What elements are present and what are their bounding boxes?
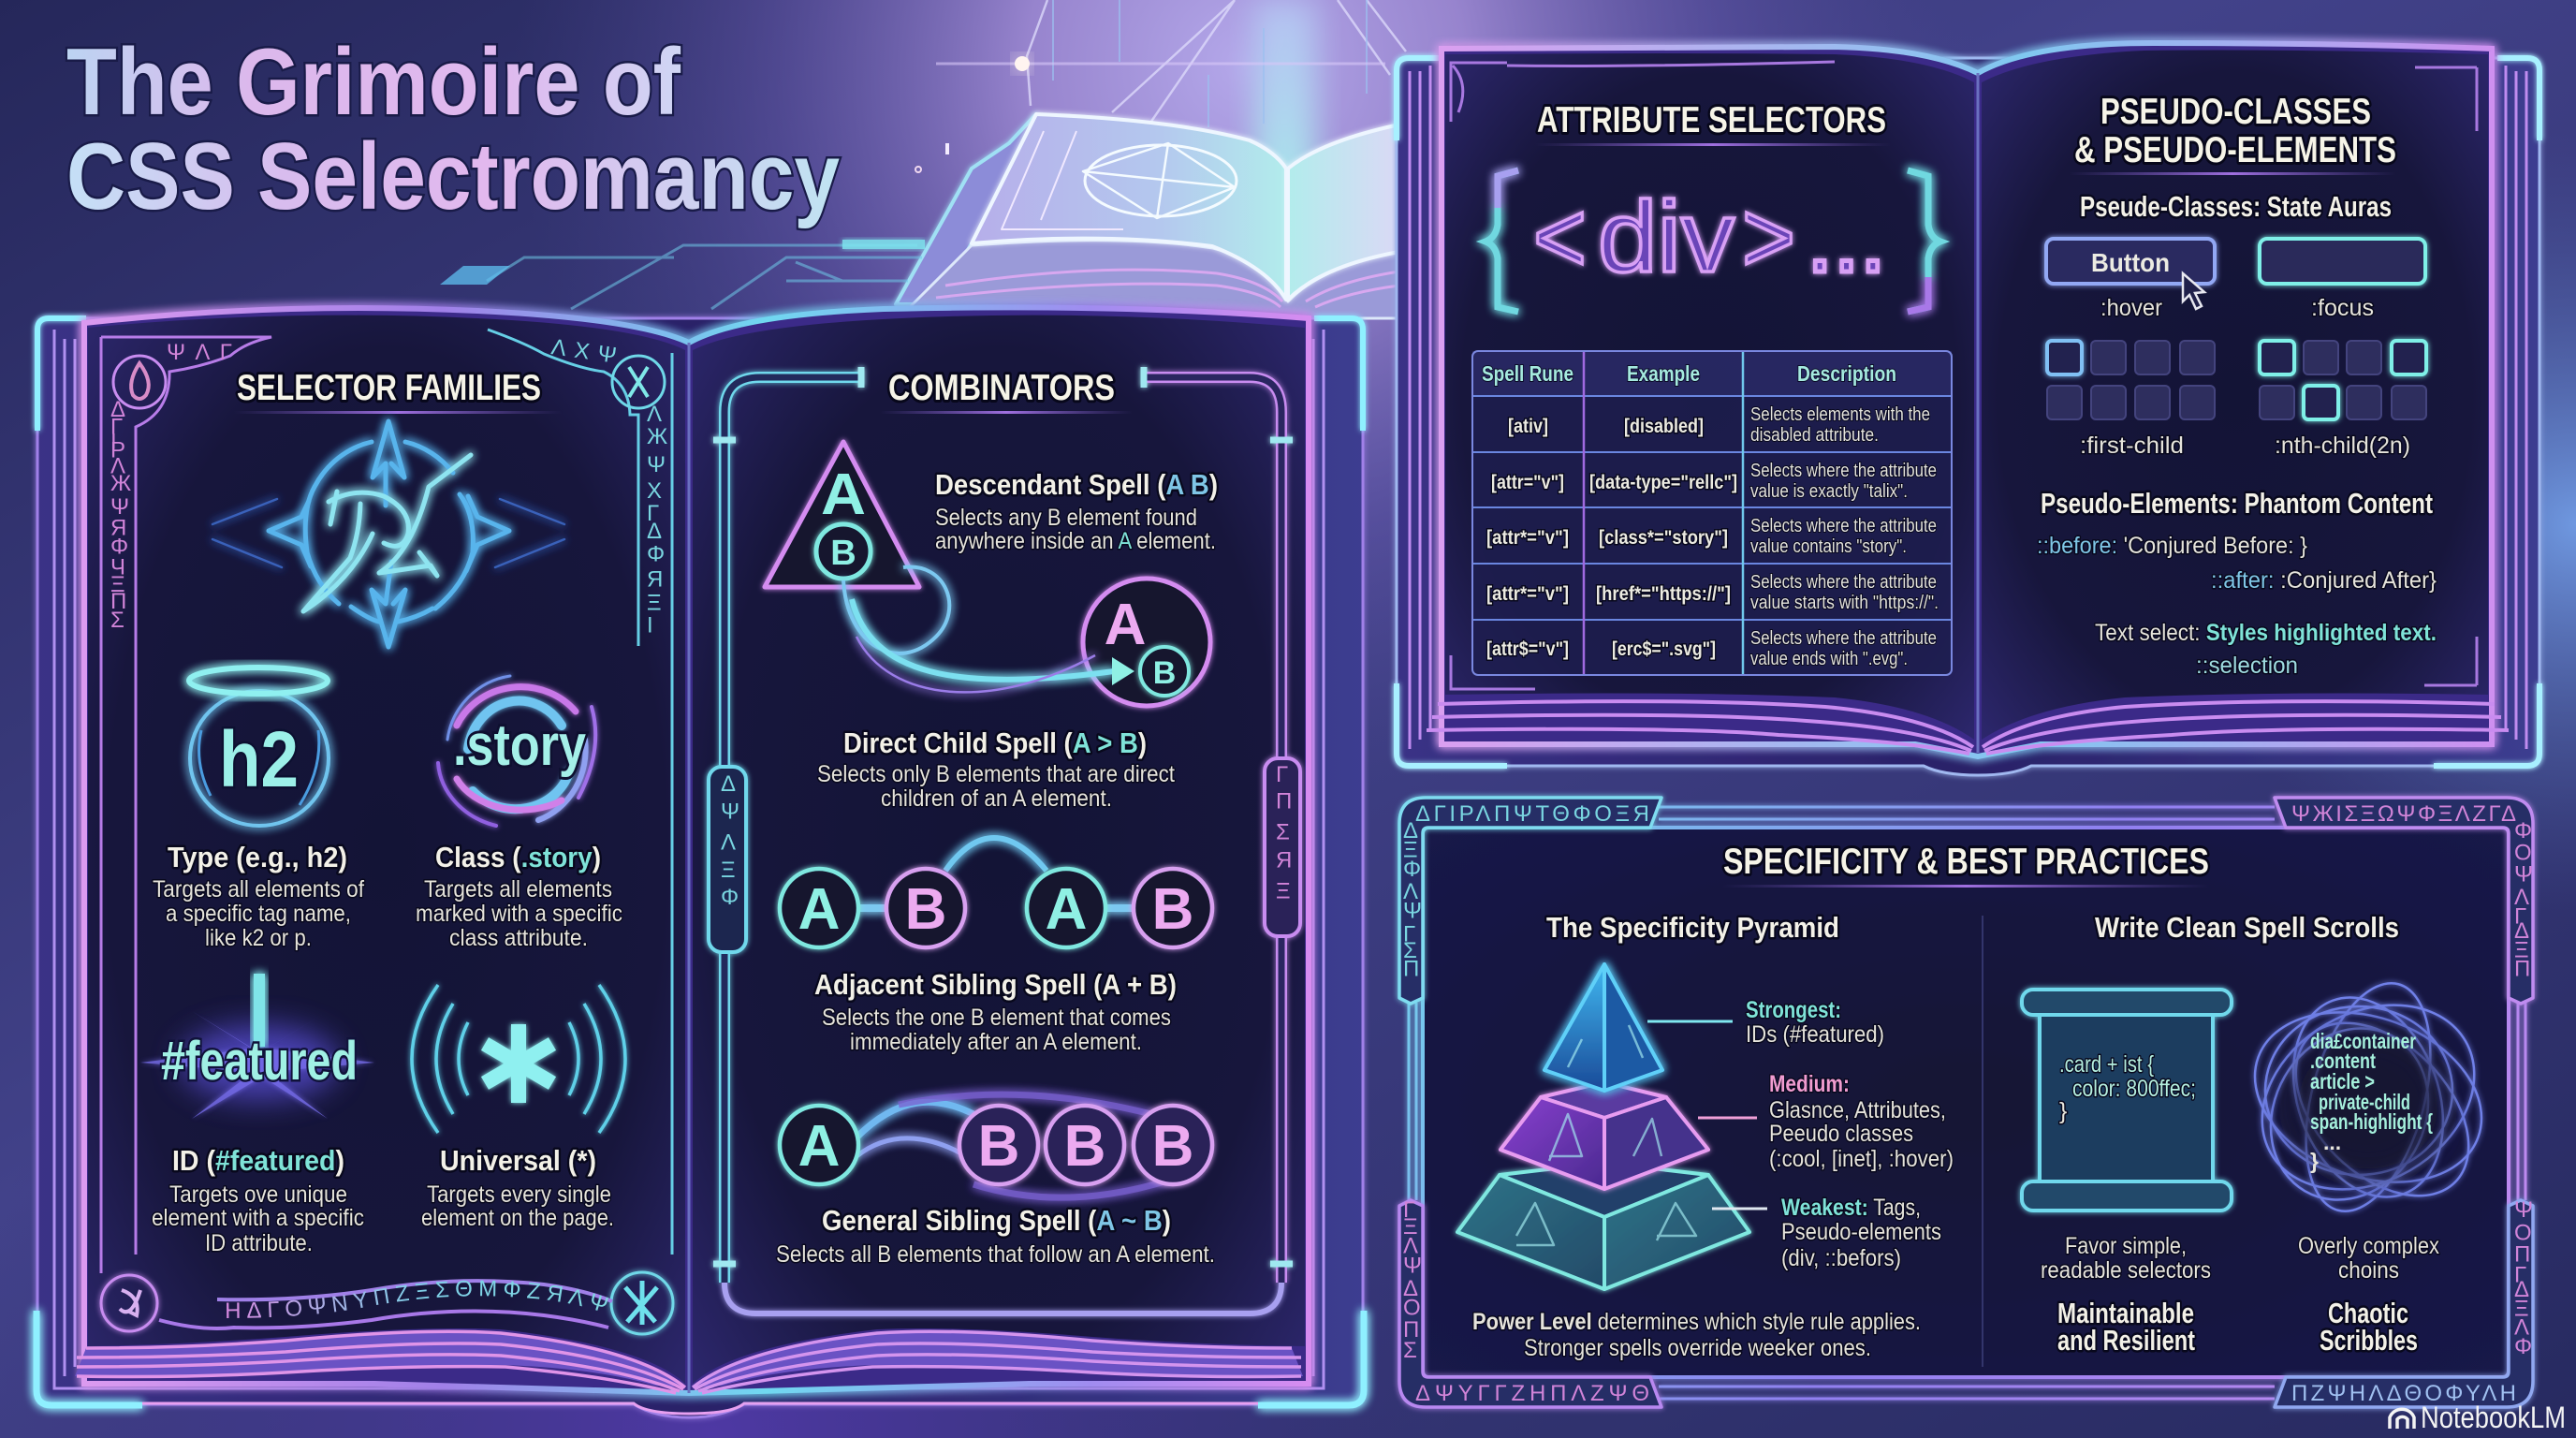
subheading: state auras: Pseude-Classes: State Auras xyxy=(2080,190,2392,223)
title xyxy=(66,30,840,229)
button: hover state xyxy=(2046,239,2215,321)
text: descendant spell xyxy=(935,468,1218,554)
text: general sibling spell: General Sibling Spell (A ~ B) xyxy=(822,1204,1171,1237)
leader lines xyxy=(1647,1021,1767,1209)
table: attribute selector runes: [attr*="v"] xyxy=(1486,527,1569,549)
icon: clean scroll: .card + ist { xyxy=(2059,1051,2154,1078)
diagram: adjacent sibling spell: B xyxy=(905,877,946,942)
text: id selector: element with a specific xyxy=(152,1205,364,1231)
text: chaotic column: Overly complex xyxy=(2298,1233,2439,1259)
code: chaotic selector: span-highlight { xyxy=(2310,1109,2433,1134)
diagram: descendant spell: A xyxy=(821,462,866,527)
heading: pseudo-classes and pseudo-elements: & PSEUDO-ELEMENTS xyxy=(2074,130,2396,170)
label: medium: Medium: xyxy=(1769,1071,1850,1097)
text: pseudo-elements xyxy=(2037,487,2437,679)
diagram: descendant spell xyxy=(765,442,1210,706)
code: chaotic selector: article > xyxy=(2310,1069,2375,1093)
text: pseudo-elements: Text select: Styles highlighted text. xyxy=(2095,620,2437,646)
icon: clean scroll: color: 800ffec; xyxy=(2072,1076,2196,1102)
pipe capsule runes xyxy=(721,762,1292,910)
text: universal selector: Targets every single xyxy=(427,1181,611,1208)
diagram: general sibling spell xyxy=(780,1094,1212,1197)
table: attribute selector runes: [class*="story"] xyxy=(1599,527,1728,549)
text: id selector xyxy=(152,1144,364,1256)
pyramid top tier xyxy=(1544,964,1662,1091)
code: chaotic selector: .content xyxy=(2310,1049,2376,1073)
panel frame xyxy=(1399,798,2533,1407)
table: attribute selector runes xyxy=(1472,351,1952,675)
subheading: specificity pyramid: The Specificity Pyramid xyxy=(1546,911,1839,944)
left page ornate frame xyxy=(101,330,673,1334)
text: descendant spell: Descendant Spell (A B) xyxy=(935,468,1218,501)
button: hover state: :hover xyxy=(2100,295,2162,321)
heading: selector families: SELECTOR FAMILIES xyxy=(237,368,541,408)
background illustration: glowing open book with rays xyxy=(440,0,1406,318)
diagram: general sibling spell: B xyxy=(978,1114,1019,1179)
frame rune bands: ΦΟΨΛΓΔΞΠ xyxy=(2514,818,2533,982)
table: attribute selector runes: Selects where the attribute xyxy=(1750,516,1937,536)
text: direct child spell: children of an A element. xyxy=(881,785,1112,812)
diagram: general sibling spell: B xyxy=(1064,1114,1105,1179)
text: id selector: ID attribute. xyxy=(205,1230,313,1256)
back book pages xyxy=(896,114,1404,318)
frame rune bands: ΔΨΥΓΓΖΗΠΛΖΨΘ xyxy=(1415,1381,1649,1406)
table: attribute selector runes: Example xyxy=(1627,361,1700,386)
text: general sibling spell: Selects all B elements that follow an A element. xyxy=(776,1241,1215,1268)
text: type selector: like k2 or p. xyxy=(205,925,312,951)
label: weakest: (div, ::befors) xyxy=(1781,1245,1901,1271)
icon: clean scroll xyxy=(2022,990,2232,1211)
left page rune bands: ΗΔΓΟΨΝΥΠΖΞΣΘΜΦΖЯΛΨ xyxy=(227,1281,608,1318)
floor grid xyxy=(487,245,922,309)
icon: .story vortex xyxy=(438,676,595,826)
text: direct child spell xyxy=(817,726,1175,812)
label: weakest xyxy=(1781,1195,1941,1271)
pyramid middle tier xyxy=(1500,1082,1708,1189)
frame rune bands: ΔΞΦΛΨΓΣΠ xyxy=(1403,818,1422,982)
text: id selector: Targets ove unique xyxy=(169,1181,347,1208)
text: universal selector xyxy=(421,1144,614,1231)
text: universal selector: element on the page. xyxy=(421,1205,614,1231)
text: type selector: Type (e.g., h2) xyxy=(168,841,347,873)
icon: h2 ring with halo: h2 xyxy=(219,715,299,803)
frame rune bands xyxy=(1403,801,2533,1406)
text: maintainable column xyxy=(2041,1233,2211,1357)
text: chaotic column: Scribbles xyxy=(2320,1324,2418,1357)
chart: specificity pyramid xyxy=(1457,964,1749,1289)
text: pseudo-elements: ::before: 'Conjured Before: } xyxy=(2037,533,2307,559)
text: class selector: Class (.story) xyxy=(435,841,601,873)
left page rune bands: ΛΧΨ xyxy=(549,334,618,369)
text: maintainable column: readable selectors xyxy=(2041,1257,2211,1284)
subheading: clean spell scrolls: Write Clean Spell Scrolls xyxy=(2095,911,2399,944)
button: focus state: :focus xyxy=(2311,295,2374,321)
icon: div glyph with braces: ... xyxy=(1807,180,1886,293)
diagram: adjacent sibling spell: A xyxy=(1046,877,1087,942)
table: attribute selector runes: Spell Rune xyxy=(1482,361,1573,386)
text: id selector: ID (#featured) xyxy=(172,1144,344,1177)
title: The Grimoire of xyxy=(66,30,681,135)
page surfaces xyxy=(1427,51,2509,754)
label: strongest: Strongest: xyxy=(1746,997,1841,1023)
title: CSS Selectromancy xyxy=(66,125,840,229)
icon: universal asterisk with waves xyxy=(412,985,625,1133)
code: chaotic selector: dia£container xyxy=(2310,1029,2416,1053)
table: attribute selector runes: value contains "story". xyxy=(1750,536,1907,557)
diagram: adjacent sibling spell xyxy=(780,838,1212,947)
book cover and page stack xyxy=(1397,43,2539,775)
table: attribute selector runes: [erc$=".svg"] xyxy=(1612,638,1716,660)
label: weakest: Pseudo-elements xyxy=(1781,1219,1941,1245)
text: type selector: Targets all elements of xyxy=(153,876,364,902)
heading: pseudo-classes and pseudo-elements: PSEUDO-CLASSES xyxy=(2100,92,2371,132)
table: attribute selector runes: [attr$="v"] xyxy=(1486,638,1569,660)
table: attribute selector runes: [attr="v"] xyxy=(1491,472,1564,493)
table: attribute selector runes: value ends with ".evg". xyxy=(1750,649,1908,669)
icon: #featured burst xyxy=(140,974,374,1119)
table: attribute selector runes: [data-type="rellc"] xyxy=(1589,472,1737,493)
icon: chaotic scribble xyxy=(2229,968,2508,1228)
icon: clean scroll: } xyxy=(2059,1098,2067,1124)
text: chaotic column: choins xyxy=(2338,1257,2399,1284)
label: medium: (:cool, [inet], :hover) xyxy=(1769,1146,1954,1172)
text: class selector: marked with a specific xyxy=(416,901,622,927)
table: attribute selector runes: [href*="https://"] xyxy=(1596,583,1731,605)
pyramid bottom tier xyxy=(1457,1163,1749,1289)
grid: nth child xyxy=(2260,341,2426,459)
text: general sibling spell xyxy=(776,1204,1215,1268)
text: power level note: Power Level determines which style rule applies. xyxy=(1472,1309,1921,1335)
label: strongest xyxy=(1746,997,1884,1048)
button: hover state: Button xyxy=(2091,248,2170,277)
table: attribute selector runes: Selects where the attribute xyxy=(1750,572,1937,593)
label: strongest: IDs (#featured) xyxy=(1746,1021,1884,1048)
text: pseudo-elements: Pseudo-Elements: Phantom Content xyxy=(2041,487,2433,520)
text: power level note: Stronger spells override weeker ones. xyxy=(1524,1335,1871,1361)
icon: div glyph with braces xyxy=(1486,170,1940,312)
text: class selector: class attribute. xyxy=(449,925,588,951)
text: power level note xyxy=(1472,1309,1921,1361)
text: maintainable column: Maintainable xyxy=(2057,1297,2194,1329)
diagram: adjacent sibling spell: A xyxy=(798,877,840,942)
light beam and rays xyxy=(915,0,1406,197)
diagram: general sibling spell: B xyxy=(1152,1114,1193,1179)
icon: div glyph with braces: div xyxy=(1598,180,1734,293)
code: chaotic selector: ... xyxy=(2323,1130,2341,1154)
diagram: adjacent sibling spell: B xyxy=(1152,877,1193,942)
diagram: general sibling spell: A xyxy=(798,1114,840,1179)
table: attribute selector runes: Selects where the attribute xyxy=(1750,461,1937,481)
table: attribute selector runes: value is exactly "talix". xyxy=(1750,481,1908,502)
frame rune bands: ΔΓΙΡΛΠΨΤΘΦΟΞЯ xyxy=(1415,801,1649,827)
panel: upper right open book xyxy=(1397,43,2539,775)
left page rune bands: ΔΓΙΡΛЖΨЯΦЧΞΠΣ xyxy=(110,397,131,633)
text: universal selector: Universal (*) xyxy=(440,1144,596,1177)
table: attribute selector runes: Description xyxy=(1797,361,1896,386)
text: descendant spell: anywhere inside an A element. xyxy=(935,528,1216,554)
text: adjacent sibling spell: immediately after an A element. xyxy=(850,1029,1142,1055)
heading: pseudo-classes and pseudo-elements xyxy=(2069,92,2396,175)
text: class selector xyxy=(416,841,622,951)
table: attribute selector runes: [attr*="v"] xyxy=(1486,583,1569,605)
label: medium xyxy=(1769,1071,1954,1172)
text: adjacent sibling spell: Adjacent Sibling Spell (A + B) xyxy=(814,968,1177,1001)
text: type selector xyxy=(153,841,364,951)
pipe capsule runes: ΔΨΛΞΦ xyxy=(721,771,739,910)
panel: large open book xyxy=(24,298,1376,1422)
text: adjacent sibling spell: Selects the one B element that comes xyxy=(822,1005,1171,1031)
diagram: descendant spell: B xyxy=(1153,655,1176,691)
label: weakest: Weakest: Tags, xyxy=(1781,1195,1921,1221)
text: chaotic column xyxy=(2298,1233,2439,1357)
left page rune bands: ΛЖΨΧΓΔΦЯΞΙ xyxy=(647,402,667,638)
left page rune bands: ΨΛΓ xyxy=(167,340,232,365)
label: medium: Peeudo classes xyxy=(1769,1121,1913,1147)
table: attribute selector runes: Selects where the attribute xyxy=(1750,628,1937,649)
icon: div glyph with braces: < xyxy=(1533,180,1587,293)
icon: .story vortex: .story xyxy=(453,713,586,778)
grid: first child xyxy=(2047,341,2215,459)
grid: nth child: :nth-child(2n) xyxy=(2275,433,2410,459)
text: adjacent sibling spell xyxy=(814,968,1177,1055)
icon: h2 ring with halo xyxy=(189,668,329,826)
text: chaotic column: Chaotic xyxy=(2328,1297,2408,1329)
heading: specificity and best practices: SPECIFICITY & BEST PRACTICES xyxy=(1723,842,2209,882)
text: maintainable column: and Resilient xyxy=(2057,1324,2195,1357)
frame rune bands: ΓΞΛΨΔΟΠΣ xyxy=(1403,1197,1422,1363)
table: attribute selector runes: value starts with "https://". xyxy=(1750,593,1939,613)
code: chaotic selector: private-child xyxy=(2319,1090,2410,1114)
label: medium: Glasnce, Attributes, xyxy=(1769,1097,1946,1123)
heading: attribute selectors: ATTRIBUTE SELECTORS xyxy=(1537,100,1886,140)
diagram: descendant spell: A xyxy=(1105,593,1146,657)
right page pipe frame xyxy=(709,367,1300,1313)
grid: first child: :first-child xyxy=(2080,433,2184,459)
icon: selector sigil xyxy=(212,421,564,647)
panel: specificity and best practices xyxy=(1399,798,2533,1407)
icon: #featured burst: #featured xyxy=(161,1031,358,1092)
frame rune bands: ΨЖΙΣΞΩΨΦΞΛΖΓΔ xyxy=(2291,801,2516,827)
left page rune bands xyxy=(110,334,667,1318)
text: direct child spell: Selects only B elements that are direct xyxy=(817,761,1175,787)
diagram: descendant spell: B xyxy=(830,534,856,573)
text: pseudo-elements: ::selection xyxy=(2196,653,2298,679)
pipe capsule runes: ΓΠΣЯΞ xyxy=(1276,762,1292,903)
text: direct child spell: Direct Child Spell (A > B) xyxy=(843,726,1147,759)
code: chaotic selector: } xyxy=(2310,1149,2319,1173)
frame rune bands: ΠΖΨΗΛΔΘΟΦΥΛΗ xyxy=(2291,1381,2516,1406)
text: descendant spell: Selects any B element found xyxy=(935,505,1197,531)
icon: div glyph with braces: > xyxy=(1742,180,1795,293)
text: type selector: a specific tag name, xyxy=(166,901,351,927)
button: focus state xyxy=(2260,239,2425,321)
table: attribute selector runes: [disabled] xyxy=(1624,416,1704,437)
heading: combinators: COMBINATORS xyxy=(888,368,1115,408)
table: attribute selector runes: disabled attribute. xyxy=(1750,425,1879,446)
table: attribute selector runes: Selects elements with the xyxy=(1750,404,1930,425)
text: class selector: Targets all elements xyxy=(424,876,612,902)
text: maintainable column: Favor simple, xyxy=(2065,1233,2187,1259)
left and right page surfaces xyxy=(75,315,1305,1393)
corner ornaments xyxy=(1451,62,2477,689)
text: pseudo-elements: ::after: :Conjured After} xyxy=(2211,567,2437,594)
frame rune bands: ΨΟΠΓΔΞΛΦ xyxy=(2514,1197,2533,1359)
book cover and page stack xyxy=(37,307,1364,1417)
code: chaotic selector xyxy=(2310,1029,2433,1173)
table: attribute selector runes: [ativ] xyxy=(1508,416,1548,437)
